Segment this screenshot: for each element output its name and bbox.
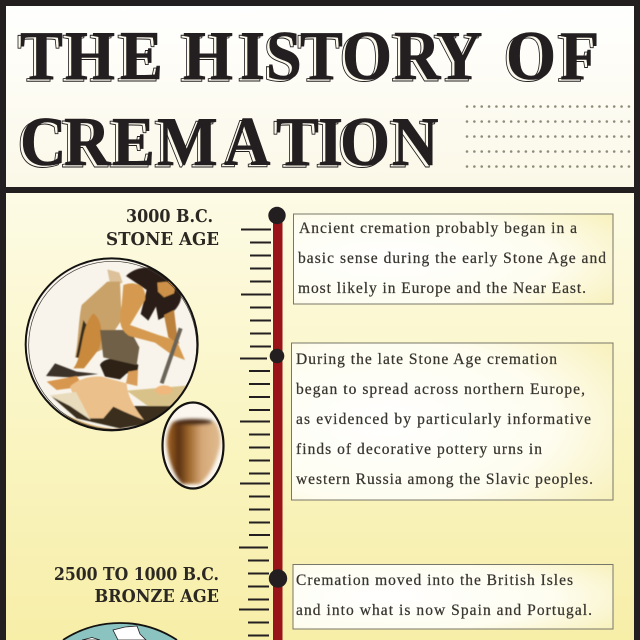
text box: Bronze Age: Cremation moved into the British Isles [296,572,573,589]
text box: late Stone Age: began to spread across northern Europe, [296,381,585,398]
timeline panel background [0,190,640,640]
marker: late Stone Age [270,349,284,363]
text box: late Stone Age: finds of decorative pottery urns in [296,441,542,458]
title: CREMATION [20,103,439,181]
text box: early Stone Age [294,214,613,304]
dotted decoration [467,106,632,166]
marker: 3000 B.C. [268,207,286,224]
text box: late Stone Age: western Russia among the Slavic peoples. [296,471,593,488]
heading: 2500 to 1000 B.C. Bronze Age: 2500 TO 1000 B.C. [54,564,219,585]
illustration: globe [63,623,177,640]
text box: Bronze Age [293,564,613,629]
text box: Bronze Age: and into what is now Spain and Portugal. [296,602,592,619]
heading: 3000 B.C. Stone Age: 3000 B.C. [126,206,213,227]
text box: early Stone Age: basic sense during the early Stone Age and [298,250,606,267]
text box: late Stone Age: as evidenced by particularly informative [296,411,591,428]
illustration: Stone Age figures in a circle [26,258,198,432]
heading: 3000 B.C. Stone Age [106,206,219,250]
text box: late Stone Age [292,343,613,500]
red timeline bar [273,215,282,640]
text box: early Stone Age: Ancient cremation probably began in a [299,220,577,237]
text box: early Stone Age: most likely in Europe and the Near East. [298,280,586,297]
heading: 2500 to 1000 B.C. Bronze Age [54,564,219,607]
title: THE HISTORY OF [20,17,599,95]
timeline ruler [239,207,287,640]
marker: 2500 to 1000 B.C. [269,569,287,588]
title [17,17,599,183]
text box: late Stone Age: During the late Stone Age cremation [296,351,557,368]
heading: 2500 to 1000 B.C. Bronze Age: BRONZE AGE [94,586,219,607]
title: CREMATION [17,105,436,183]
ruler ticks [239,230,271,636]
title: THE HISTORY OF [17,19,596,97]
heading: 3000 B.C. Stone Age: STONE AGE [106,229,219,250]
illustration: pottery urn in an oval [162,402,224,488]
title panel background [0,0,640,190]
